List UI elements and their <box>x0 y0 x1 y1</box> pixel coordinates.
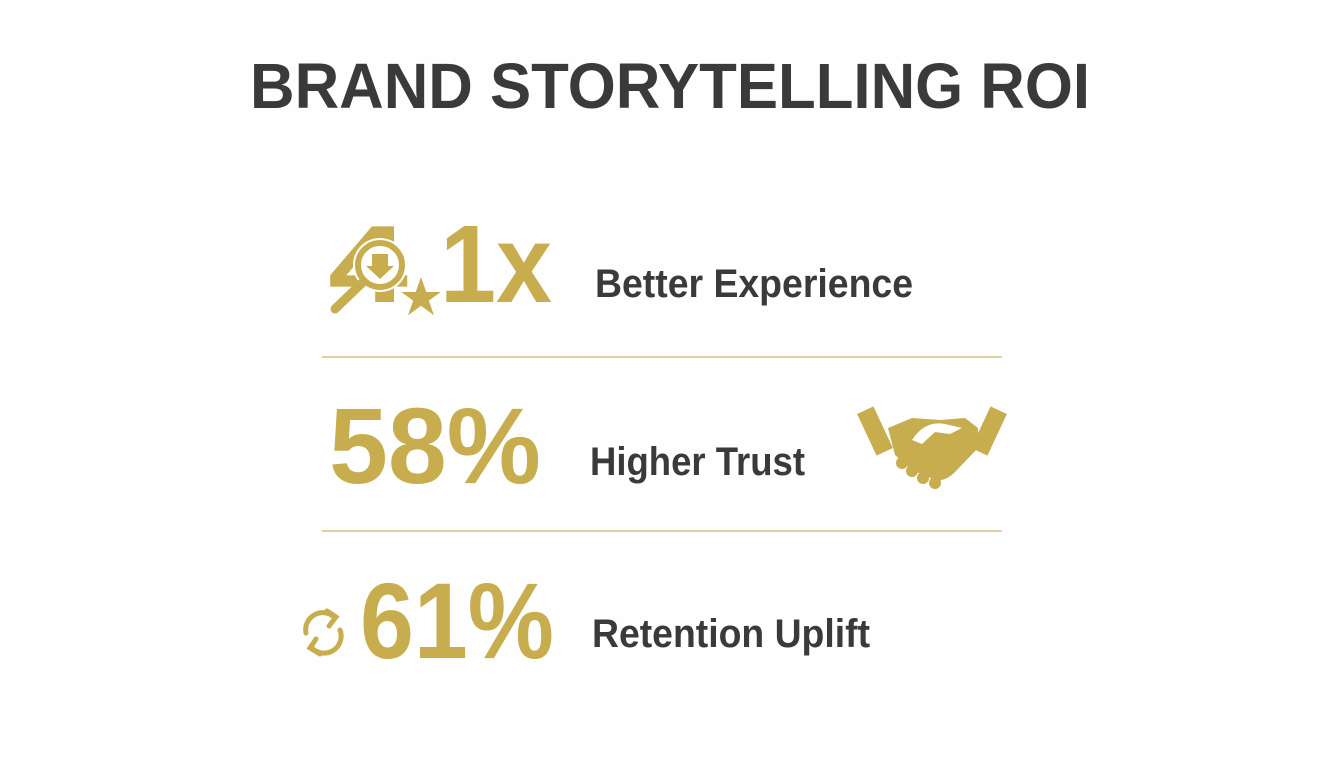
icon: handshake <box>857 406 1007 489</box>
label: Retention Uplift <box>592 612 870 656</box>
stat: 58% <box>329 385 541 506</box>
icon: magnifier with star <box>335 238 444 318</box>
label: Higher Trust <box>590 440 805 484</box>
row: 4.1x better experience <box>328 203 913 326</box>
title: BRAND STORYTELLING ROI <box>250 50 1090 122</box>
stat: 4.1x: 4 <box>328 203 408 326</box>
stat: 4.1x: 1x <box>440 203 552 326</box>
row: 58% higher trust <box>329 385 1007 506</box>
stat: 61% <box>360 560 554 681</box>
row: 61% retention uplift <box>306 560 870 681</box>
icon: refresh <box>306 611 341 654</box>
stat: 4.1x <box>328 203 552 326</box>
label: Better Experience <box>595 262 913 306</box>
